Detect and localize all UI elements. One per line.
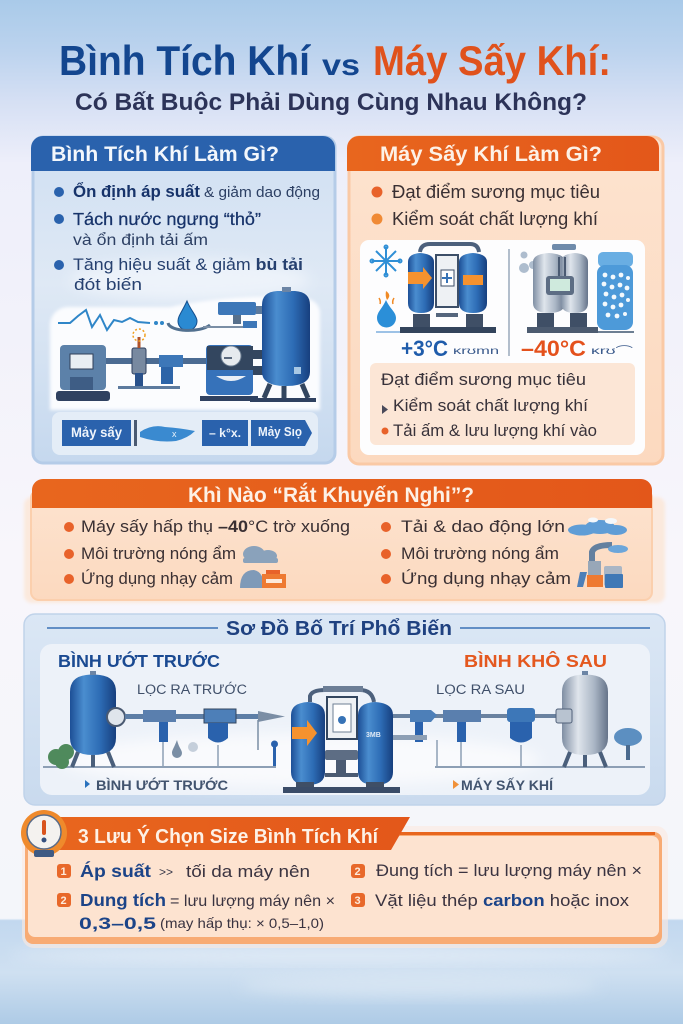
peach note card: Đạt điểm sương mục tiêu xyxy=(381,371,586,389)
item 3: Vặt liệu thép carbon hoặc inox xyxy=(375,891,630,910)
top valve xyxy=(218,302,256,315)
divider xyxy=(508,249,510,356)
icon: tree xyxy=(614,728,642,760)
item 2 left: = lưu lượng máy nên × xyxy=(170,893,335,910)
column labels xyxy=(58,650,607,697)
inner card xyxy=(40,644,650,795)
right list: Môi trường nóng ẩm xyxy=(401,544,559,563)
icon: humid cloud xyxy=(243,546,278,563)
wet tank xyxy=(70,671,125,767)
left list: Môi trường nóng ẩm xyxy=(81,545,236,563)
bullet list: tank functions: & giảm dao động xyxy=(204,185,320,201)
pre filters and pipes xyxy=(125,709,285,767)
after filters and pipes xyxy=(393,708,558,767)
bullet list: tank functions: đót biến xyxy=(74,276,142,294)
dew point labels: –40°C xyxy=(521,336,586,361)
dryer: grey twin tower xyxy=(519,244,634,333)
column labels: LỌC RA TRƯỚC xyxy=(137,682,247,697)
item 2 right: Đung tích = lưu lượng máy nên × xyxy=(376,861,642,880)
item 2 left: Dung tích xyxy=(80,890,166,910)
bullet list: tank functions: và ổn định tải ấm xyxy=(73,232,208,249)
title: Máy Sấy Khí: xyxy=(373,37,611,84)
item 1 xyxy=(57,860,310,881)
item 1: tối da máy nên xyxy=(186,862,310,881)
bullet list: dryer functions xyxy=(372,182,600,229)
icon: bushes xyxy=(48,744,74,769)
strip: labels under illustration: x xyxy=(172,429,177,439)
icon: sensitive equipment xyxy=(240,570,286,588)
panel header: blue xyxy=(31,136,335,171)
dew point labels: ĸrʊmn xyxy=(453,346,499,357)
icon: blue clouds xyxy=(568,518,627,536)
water drop xyxy=(178,301,197,330)
center dryer: 3MB xyxy=(366,732,381,739)
left list: Ứng dụng nhạy cảm xyxy=(81,569,233,588)
pipe to tank xyxy=(253,350,263,359)
left list xyxy=(64,518,350,588)
desiccant cylinder xyxy=(597,252,633,330)
illustration: compressor to tank xyxy=(50,287,320,410)
panel header: orange: Máy Sấy Khí Làm Gì? xyxy=(380,143,602,166)
column labels: BÌNH KHÔ SAU xyxy=(464,650,607,671)
right list xyxy=(381,517,571,588)
dew point labels xyxy=(401,336,633,361)
item 1: 1 xyxy=(60,866,67,878)
item 2 left: 0,3–0,5 xyxy=(79,914,156,933)
gauge unit xyxy=(206,345,253,395)
item 2 left xyxy=(57,890,335,933)
center dryer xyxy=(283,686,400,793)
bullet list: dryer functions: Đạt điểm sương mục tiêu xyxy=(392,182,600,202)
dew point labels: ĸrʊ⌒ xyxy=(591,345,633,357)
strip: labels under illustration: Mảy Sıọ xyxy=(258,424,302,439)
dew point labels: +3°C xyxy=(401,336,448,361)
item 1: >> xyxy=(159,865,173,879)
right list: Tải & dao động lớn xyxy=(401,517,565,536)
header: Khì Nào “Rắt Khuyến Nghi”? xyxy=(188,483,474,507)
panel: Sơ Đồ Bố Trí Phổ Biến xyxy=(24,614,665,805)
title xyxy=(59,37,611,84)
item 2 left: (may hấp thụ: × 0,5–1,0) xyxy=(160,915,324,931)
column labels: BÌNH ƯỚT TRƯỚC xyxy=(58,650,220,671)
title: vs xyxy=(322,49,360,82)
item 3: 3 xyxy=(354,895,361,907)
peach note card: Tải ấm & lưu lượng khí vào xyxy=(393,422,597,440)
item 2 right: 2 xyxy=(354,866,361,878)
icon: drop with flame xyxy=(377,291,396,328)
strip: labels under illustration xyxy=(52,412,318,455)
bottom captions xyxy=(85,776,554,793)
pressure wave xyxy=(58,310,150,330)
bullet list: dryer functions: Kiểm soát chất lượng khí xyxy=(392,209,598,229)
bullet list: tank functions: Tăng hiệu suất & giảm bù tải xyxy=(73,255,303,274)
left list: Máy sấy hấp thụ –40°C trờ xuống xyxy=(81,518,350,536)
bullet list: tank functions: Tách nước ngưng “thỏ” xyxy=(73,209,261,229)
dryer: blue twin tower xyxy=(376,244,496,333)
icon: snowflake xyxy=(370,246,402,276)
pipes and filters xyxy=(106,358,206,364)
air tank xyxy=(262,291,310,386)
peach note card: Kiểm soát chất lượng khí xyxy=(393,397,588,415)
section heading: Sơ Đồ Bố Trí Phổ Biến xyxy=(226,618,452,640)
panel header: blue: Bình Tích Khí Làm Gì? xyxy=(51,143,279,166)
bullet list: tank functions xyxy=(54,182,320,294)
item 2 left: 2 xyxy=(60,895,67,907)
ground lines xyxy=(43,766,645,768)
right list: Ứng dụng nhạy cảm xyxy=(401,569,571,588)
bottom captions: BÌNH ƯỚT TRƯỚC xyxy=(96,776,228,793)
dry tank xyxy=(556,671,608,767)
strip: labels under illustration: – k°x. xyxy=(209,426,241,440)
item 1: Áp suất xyxy=(80,860,151,881)
panel: Bình Tích Khí Làm Gì xyxy=(31,136,335,463)
compressor xyxy=(60,345,106,390)
column labels: LỌC RA SAU xyxy=(436,682,525,697)
icon: factory pipes and bottles xyxy=(577,545,628,588)
bottom captions: MÁY SẤY KHÍ xyxy=(461,777,554,793)
panel: 3 Lưu Ý Chọn Size Bình Tích Khí xyxy=(21,810,668,948)
strip: labels under illustration: Mảy sấy xyxy=(71,425,122,440)
ribbon heading xyxy=(48,817,410,850)
title: Bình Tích Khí xyxy=(59,37,311,84)
header xyxy=(32,479,652,508)
icon: warning badge xyxy=(21,810,67,857)
panel: Khi Nào Rất Khuyến Nghị xyxy=(24,479,665,603)
peach note card xyxy=(370,363,635,445)
ribbon heading: 3 Lưu Ý Chọn Size Bình Tích Khí xyxy=(78,824,379,848)
subtitle: Có Bất Buộc Phải Dùng Cùng Nhau Không? xyxy=(75,89,587,116)
white inner card xyxy=(360,240,645,455)
bullet list: tank functions: Ổn định áp suất xyxy=(73,182,200,201)
panel: Máy Sấy Khí Làm Gì xyxy=(347,136,663,464)
panel header: orange xyxy=(347,136,659,171)
